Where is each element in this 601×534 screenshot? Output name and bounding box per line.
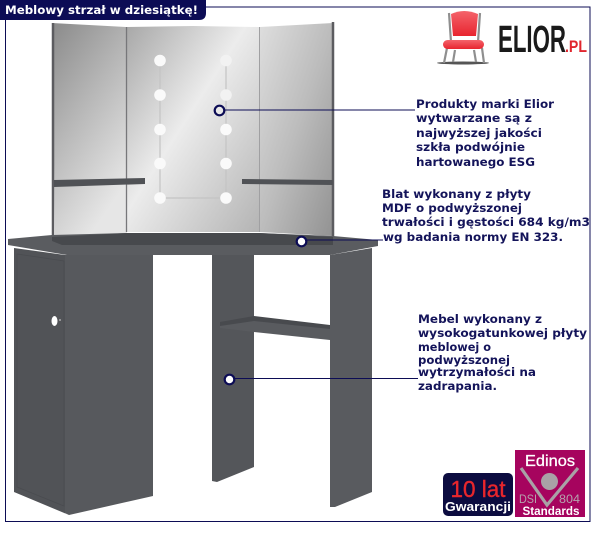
- right mirror panel: [260, 23, 333, 236]
- cabinet side: [65, 255, 153, 515]
- header banner: [0, 0, 206, 20]
- text: tabletop: [382, 187, 590, 244]
- badge: Edinos standards: DSI: [519, 492, 537, 506]
- badge: Edinos standards: Edinos: [525, 453, 575, 470]
- text: board: Mebel wykonany z: [418, 312, 542, 326]
- text: board: [418, 312, 587, 393]
- right leg: [330, 248, 372, 507]
- callout marker: board: [225, 375, 418, 384]
- header banner: Meblowy strzał w dziesiątkę!: [5, 3, 198, 17]
- text: board: wysokogatunkowej płyty: [418, 326, 587, 340]
- dressing table: [8, 233, 378, 515]
- tabletop: [8, 233, 378, 255]
- text: glass: hartowanego ESG: [416, 155, 535, 169]
- lower shelf: [220, 316, 330, 340]
- cabinet door: [14, 248, 69, 515]
- mirror lights: [154, 55, 232, 204]
- middle leg: [212, 255, 254, 482]
- text: tabletop: MDF o podwyższonej: [382, 201, 522, 215]
- text: tabletop: Blat wykonany z płyty: [382, 187, 531, 201]
- callout marker: mirror: [215, 106, 415, 115]
- text: board: zadrapania.: [418, 379, 497, 393]
- cabinet door knob: [52, 316, 61, 326]
- badge: 10 year warranty: 10 lat: [450, 476, 506, 502]
- text: tabletop: wg badania normy EN 323.: [383, 230, 563, 244]
- text: glass: najwyższej jakości: [416, 126, 542, 140]
- logo: Elior: [437, 11, 587, 64]
- mirror: [52, 22, 333, 238]
- text: glass: Produkty marki Elior: [416, 97, 554, 111]
- right small shelf: [242, 179, 333, 185]
- icon: red chair: [437, 11, 489, 64]
- text: board: meblowej o: [418, 340, 491, 354]
- text: glass: wytwarzane są z: [416, 111, 532, 125]
- text: board: wytrzymałości na: [418, 365, 536, 379]
- badge: Edinos standards: 804: [559, 492, 580, 506]
- badge: Edinos standards: [515, 450, 585, 518]
- callout marker: tabletop: [297, 237, 383, 246]
- text: board: podwyższonej: [418, 353, 510, 367]
- badge: 10 year warranty: Gwarancji: [445, 500, 511, 514]
- left mirror panel: [52, 23, 127, 236]
- centre mirror panel: [127, 26, 259, 232]
- text: tabletop: trwałości i gęstości 684 kg/m3: [382, 215, 590, 229]
- badge: Edinos standards: Standards: [522, 506, 580, 518]
- left small shelf: [54, 178, 145, 187]
- text: glass: [416, 97, 554, 169]
- text: glass: szkła podwójnie: [416, 140, 525, 154]
- badge: 10 year warranty: [443, 473, 513, 516]
- logo: Elior: .PL: [565, 37, 587, 56]
